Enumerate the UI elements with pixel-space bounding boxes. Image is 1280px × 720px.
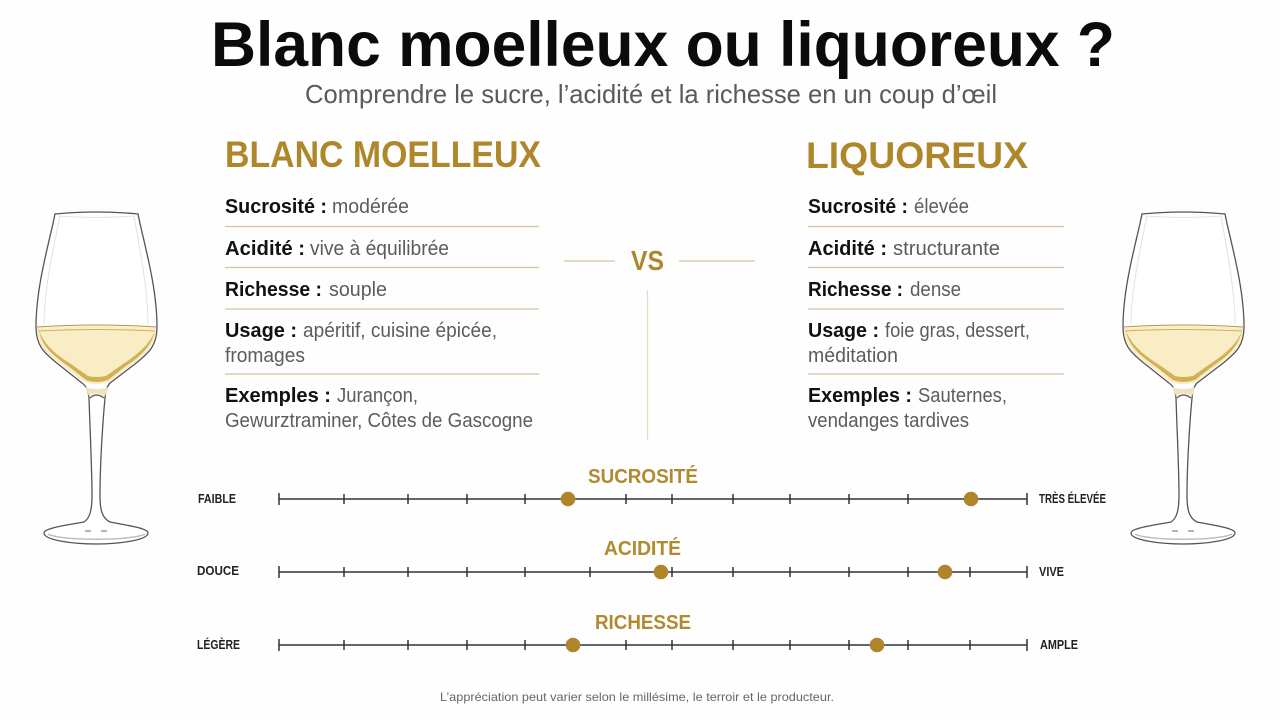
scale: sucrosité	[198, 465, 1106, 506]
row: usage: Usage :	[808, 320, 879, 342]
scale: richesse: AMPLE	[1040, 637, 1078, 652]
row: usage: méditation	[808, 345, 898, 367]
row: exemples	[225, 385, 533, 432]
panel: blanc moelleux	[225, 133, 541, 432]
row: acidité	[225, 238, 449, 260]
row: richesse: souple	[329, 279, 387, 301]
row: exemples	[808, 385, 1007, 432]
row: usage: fromages	[225, 345, 305, 367]
row: exemples: Gewurztraminer, Côtes de Gascogne	[225, 410, 533, 432]
footnote: L’appréciation peut varier selon le millésime, le terroir et le producteur.	[440, 690, 834, 704]
row: richesse	[808, 279, 961, 301]
scale: acidité: ACIDITÉ	[604, 537, 681, 560]
row: acidité: structurante	[893, 238, 1000, 260]
scale: richesse	[197, 612, 1078, 652]
row: sucrosité	[808, 196, 969, 218]
row: usage: apéritif, cuisine épicée,	[303, 320, 497, 342]
row: sucrosité: Sucrosité :	[225, 196, 327, 218]
row: sucrosité	[225, 196, 409, 218]
row: sucrosité: Sucrosité :	[808, 196, 908, 218]
marker: blanc moelleux	[566, 638, 580, 652]
heading: liquoreux: LIQUOREUX	[806, 134, 1028, 176]
scale: sucrosité: FAIBLE	[198, 491, 236, 506]
marker: blanc moelleux	[654, 565, 668, 579]
scale: acidité: VIVE	[1039, 564, 1064, 579]
row: exemples: Sauternes,	[918, 385, 1007, 407]
scale: richesse: RICHESSE	[595, 612, 691, 634]
icon: left wine glass	[36, 212, 157, 544]
row: exemples: Jurançon,	[337, 385, 418, 407]
row: usage	[225, 320, 497, 367]
scale: richesse: LÉGÈRE	[197, 637, 240, 652]
vs divider: VS	[631, 245, 664, 276]
title: Blanc moelleux ou liquoreux ?	[211, 10, 1115, 80]
row: usage: foie gras, dessert,	[885, 320, 1030, 342]
scale: acidité	[197, 537, 1064, 579]
row: acidité: Acidité :	[225, 238, 305, 260]
row: exemples: Exemples :	[225, 385, 331, 407]
row: usage: Usage :	[225, 320, 297, 342]
scale: acidité: DOUCE	[197, 563, 239, 578]
panel: liquoreux	[806, 134, 1064, 432]
row: acidité: Acidité :	[808, 238, 887, 260]
marker: liquoreux	[964, 492, 978, 506]
icon: right wine glass	[1123, 212, 1244, 544]
scale: sucrosité: TRÈS ÉLEVÉE	[1039, 491, 1106, 506]
row: sucrosité: élevée	[914, 196, 969, 218]
marker: blanc moelleux	[561, 492, 575, 506]
subtitle: Comprendre le sucre, l’acidité et la richesse en un coup d’œil	[305, 79, 997, 109]
row: richesse: Richesse :	[808, 279, 903, 301]
row: richesse: dense	[910, 279, 961, 301]
row: usage	[808, 320, 1030, 367]
marker: liquoreux	[938, 565, 952, 579]
row: richesse: Richesse :	[225, 279, 322, 301]
marker: liquoreux	[870, 638, 884, 652]
row: sucrosité: modérée	[332, 196, 409, 218]
row: acidité	[808, 238, 1000, 260]
row: exemples: vendanges tardives	[808, 410, 969, 432]
scale: sucrosité: SUCROSITÉ	[588, 465, 698, 488]
heading: blanc moelleux: BLANC MOELLEUX	[225, 133, 541, 175]
row: exemples: Exemples :	[808, 385, 912, 407]
row: acidité: vive à équilibrée	[310, 238, 449, 260]
row: richesse	[225, 279, 387, 301]
